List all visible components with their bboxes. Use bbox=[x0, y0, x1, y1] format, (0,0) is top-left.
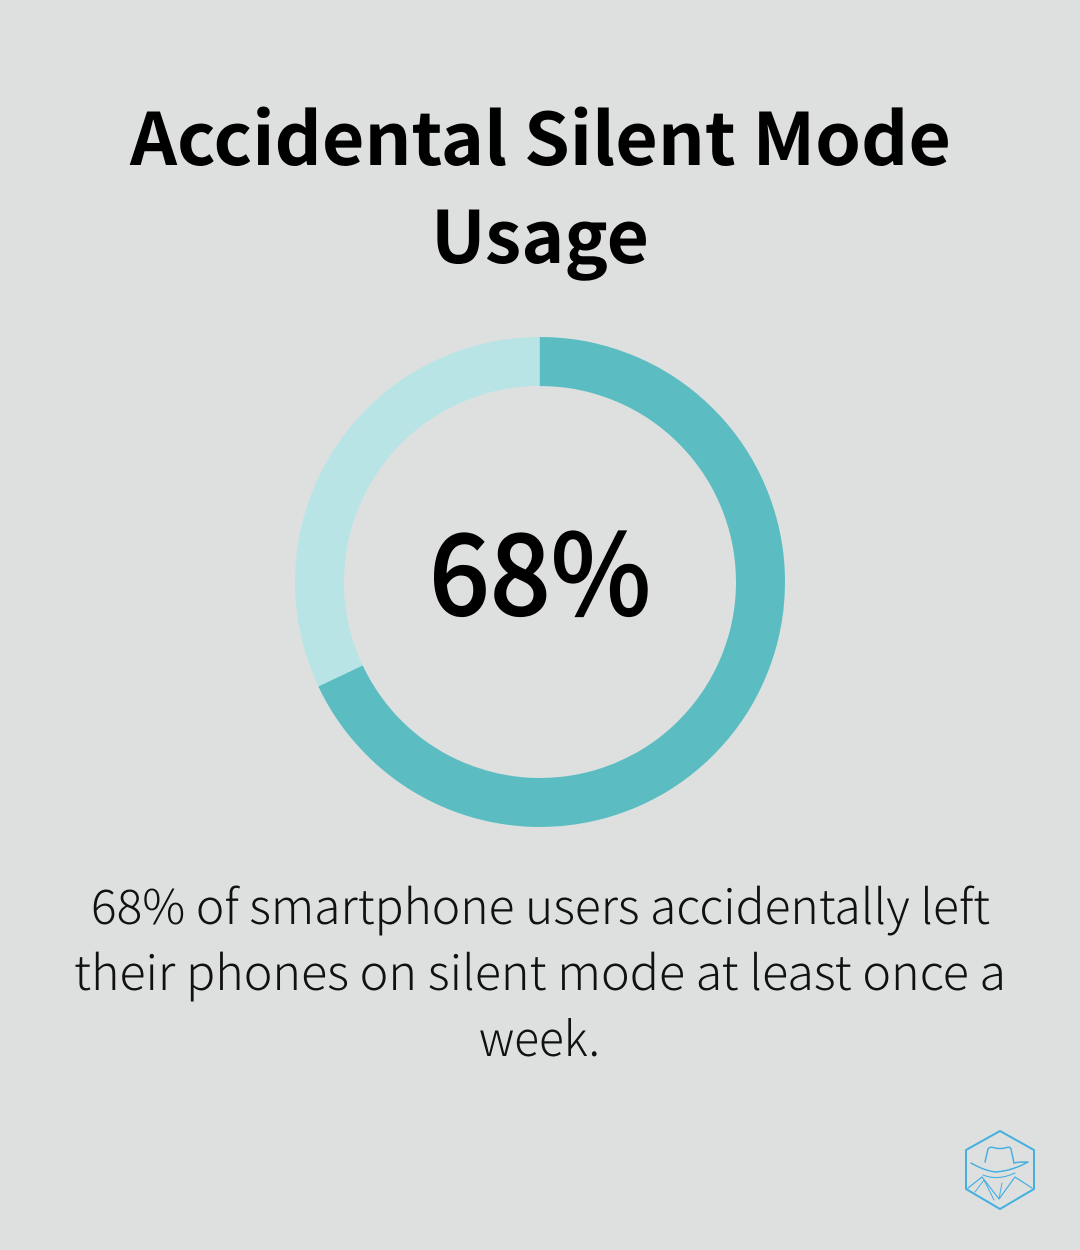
description text bbox=[74, 868, 1006, 1070]
donut chart: 68% bbox=[320, 362, 760, 802]
title: Accidental Silent Mode bbox=[129, 81, 951, 186]
center value: 68% bbox=[429, 486, 651, 648]
description text: their phones on silent mode at least once a bbox=[74, 934, 1006, 1004]
ring track: remaining share bbox=[320, 362, 760, 802]
ring arc: 68% share bbox=[320, 362, 760, 802]
description text: 68% of smartphone users accidentally left bbox=[91, 868, 990, 938]
title bbox=[129, 81, 951, 284]
description text: week. bbox=[479, 1000, 600, 1070]
title: Usage bbox=[431, 179, 649, 284]
icon: hexagon logo with hat and coat bbox=[966, 1131, 1034, 1209]
